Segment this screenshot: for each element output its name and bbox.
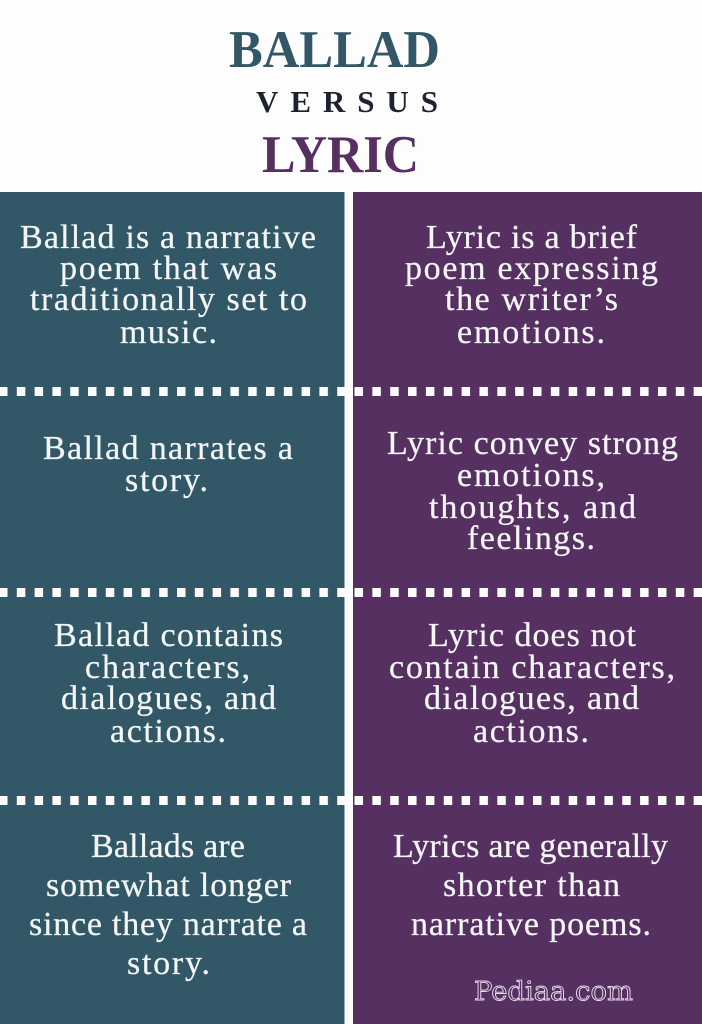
heading: versus: VERSUS bbox=[256, 84, 438, 119]
text block: lyric length bbox=[393, 828, 668, 943]
panel: ballad column bbox=[0, 192, 344, 1024]
text block: ballad narrates: Ballad narrates a bbox=[43, 430, 293, 467]
panel: lyric column bbox=[353, 192, 702, 1024]
text block: ballad definition: traditionally set to bbox=[30, 281, 307, 318]
text block: ballad definition: poem that was bbox=[60, 250, 277, 287]
text block: ballad contents: dialogues, and bbox=[61, 680, 276, 717]
text block: ballad narrates bbox=[43, 430, 293, 499]
text block: ballad length bbox=[29, 828, 307, 982]
text block: lyric length: narrative poems. bbox=[411, 906, 651, 943]
title bbox=[229, 21, 440, 184]
text block: lyric contents bbox=[389, 617, 675, 750]
text block: lyric contents: actions. bbox=[473, 713, 589, 750]
text block: ballad narrates: story. bbox=[125, 462, 208, 499]
text block: lyric contents: Lyric does not bbox=[428, 617, 637, 654]
text block: ballad definition: Ballad is a narrative bbox=[20, 219, 316, 256]
text block: ballad length: story. bbox=[127, 945, 210, 982]
text block: ballad length: somewhat longer bbox=[46, 867, 292, 904]
text block: ballad definition bbox=[20, 219, 316, 351]
text block: lyric contents: contain characters, bbox=[389, 649, 675, 686]
text block: ballad contents bbox=[54, 617, 283, 750]
text block: lyric emotions: Lyric convey strong bbox=[387, 425, 678, 462]
text block: lyric length: shorter than bbox=[443, 867, 620, 904]
text block: lyric length: Lyrics are generally bbox=[393, 828, 668, 865]
heading: ballad: BALLAD bbox=[229, 21, 440, 79]
text block: ballad length: Ballads are bbox=[91, 828, 245, 865]
text block: lyric definition: the writer’s bbox=[445, 281, 618, 318]
heading: lyric: LYRIC bbox=[262, 126, 419, 184]
text block: lyric contents: dialogues, and bbox=[424, 680, 639, 717]
text block: lyric emotions: feelings. bbox=[467, 520, 595, 557]
text block: ballad definition: music. bbox=[120, 314, 217, 351]
text block: lyric emotions: emotions, bbox=[457, 457, 605, 494]
text block: ballad contents: Ballad contains bbox=[54, 617, 283, 654]
text block: lyric emotions: thoughts, and bbox=[429, 489, 636, 526]
text block: lyric definition: emotions. bbox=[457, 314, 605, 351]
text block: ballad contents: characters, bbox=[85, 649, 250, 686]
text block: ballad contents: actions. bbox=[110, 713, 226, 750]
text block: lyric emotions bbox=[387, 425, 678, 557]
logo: pediaa.com: Pediaa.com bbox=[474, 977, 633, 1007]
text block: lyric definition: Lyric is a brief bbox=[426, 219, 638, 256]
text block: ballad length: since they narrate a bbox=[29, 906, 307, 943]
text block: lyric definition: poem expressing bbox=[405, 250, 658, 287]
text block: lyric definition bbox=[405, 219, 658, 351]
